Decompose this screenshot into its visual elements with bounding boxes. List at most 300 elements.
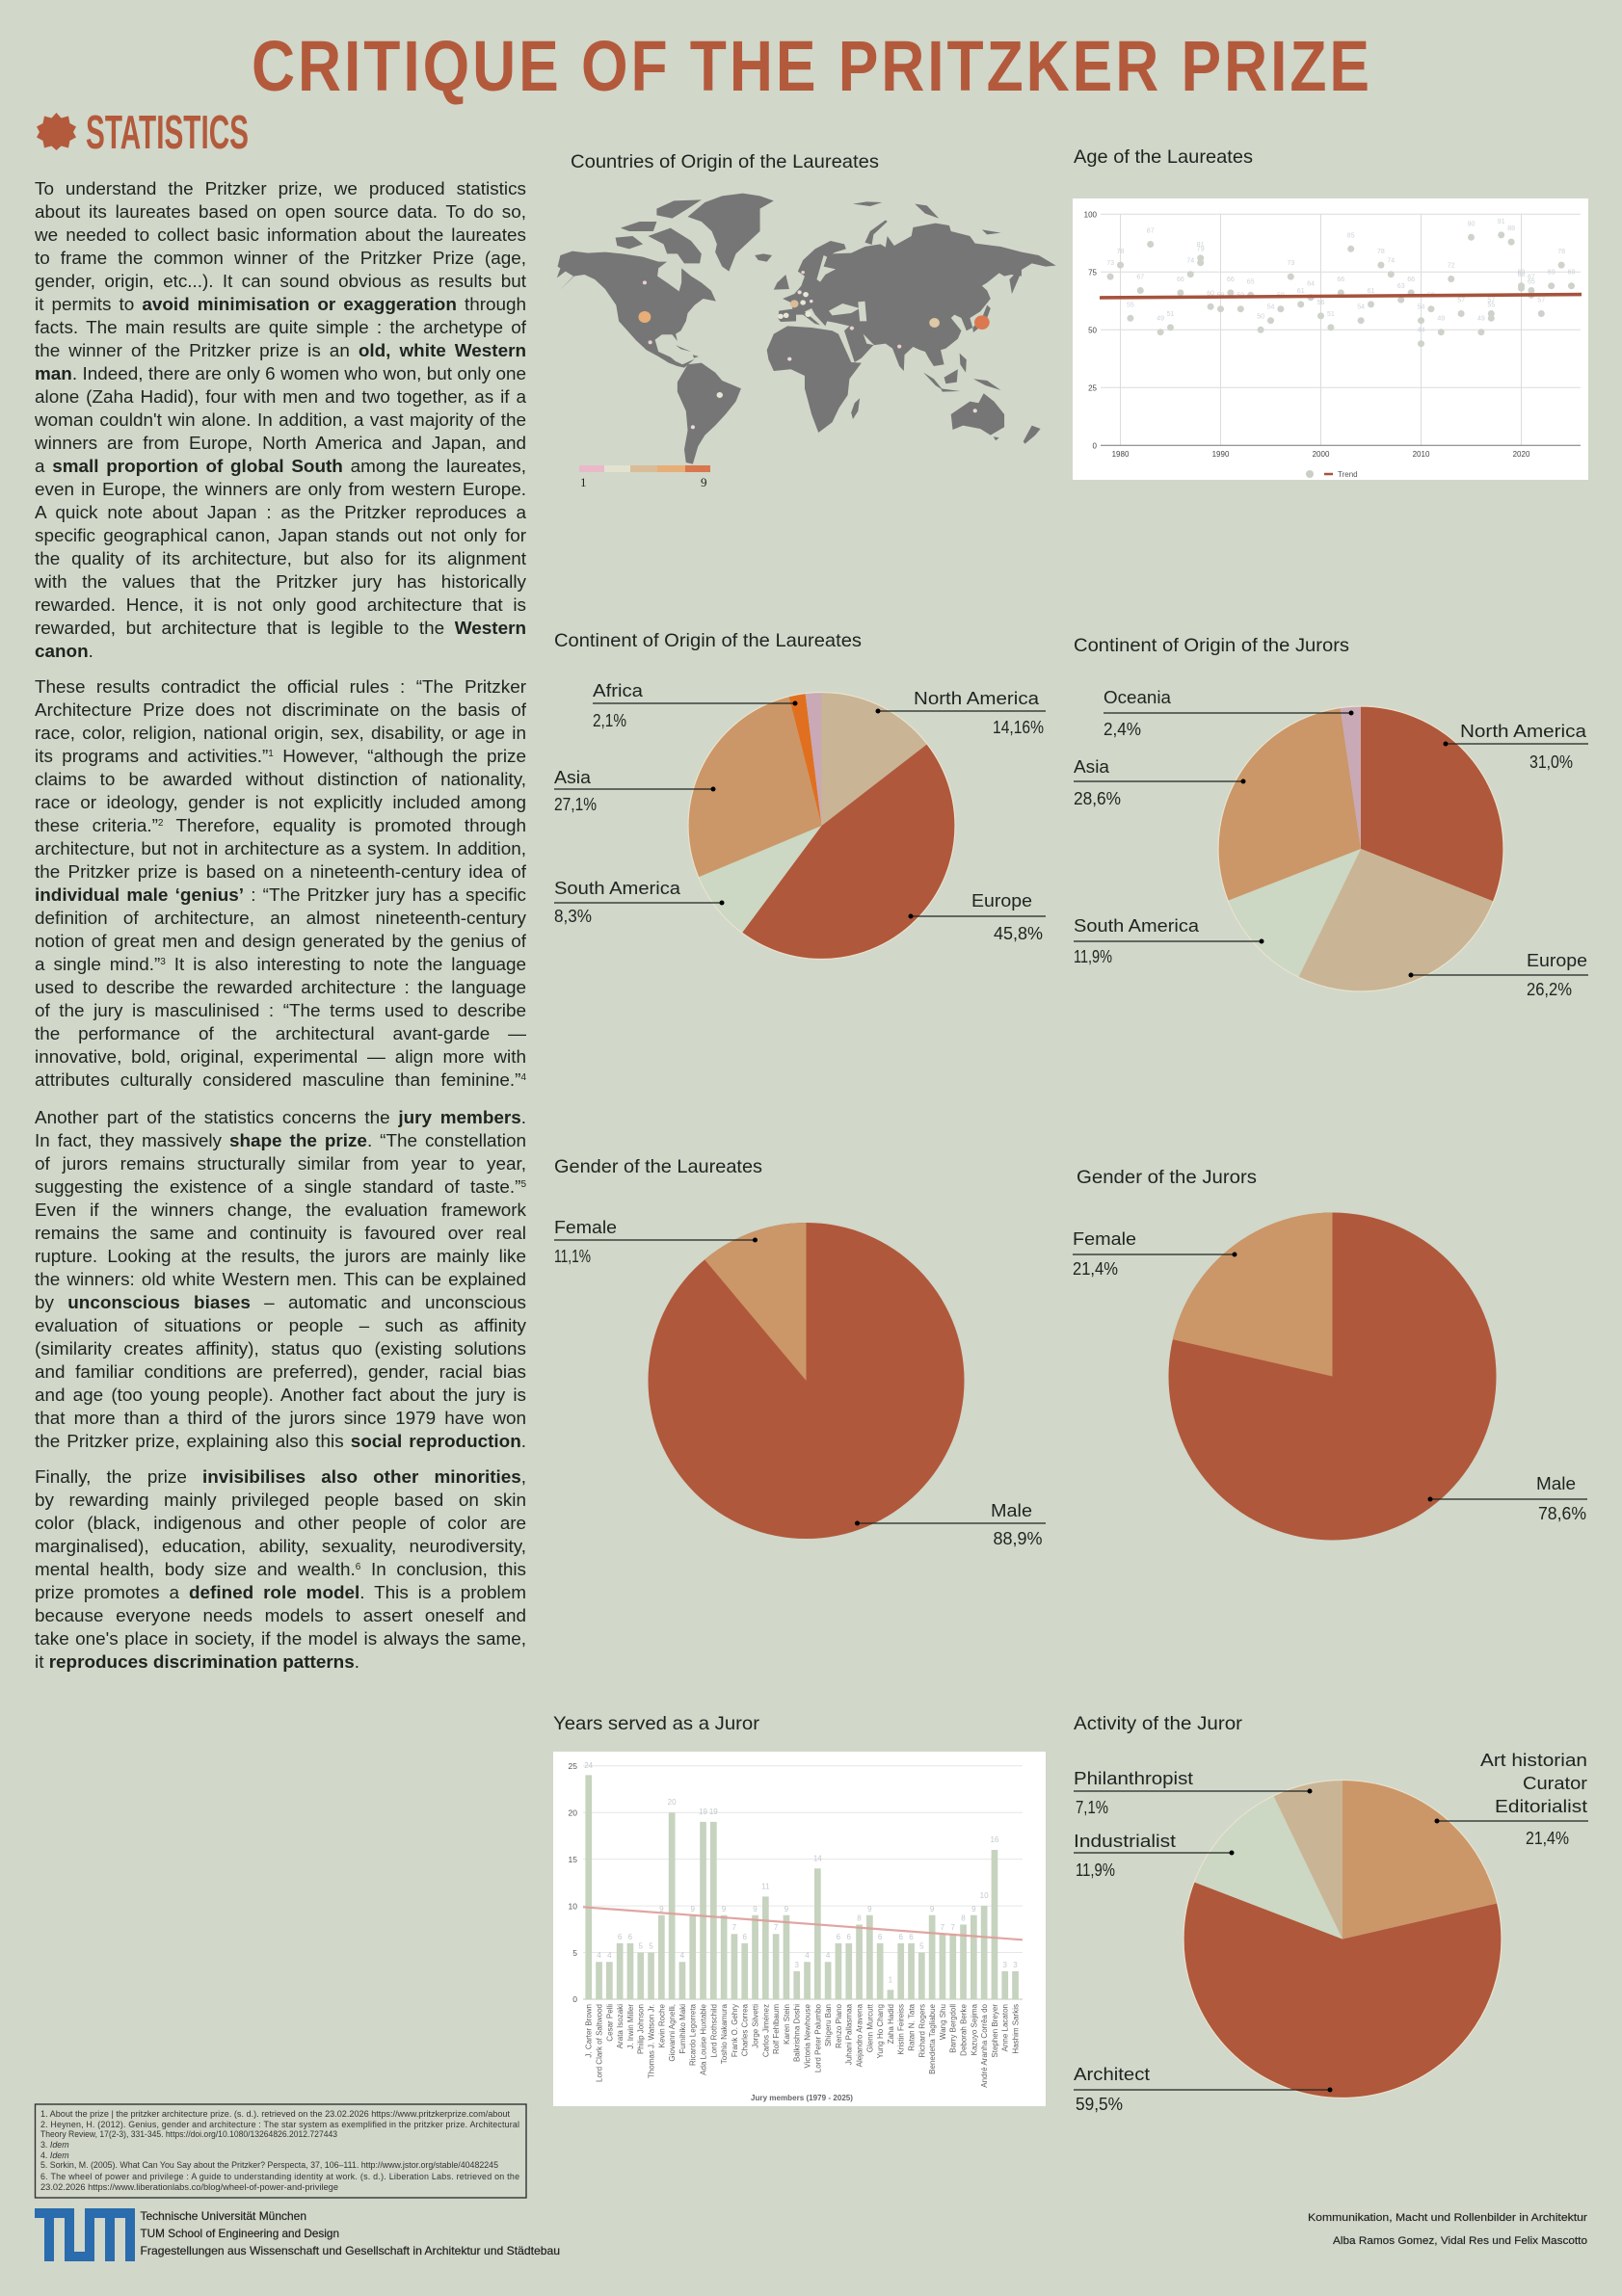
- bar chart: 9: [690, 1905, 695, 1913]
- chart legend: Trend: [1338, 470, 1358, 479]
- text block: paragraph 1: alone (Zaha Hadid), four with men and two together, as if a: [35, 387, 526, 408]
- text block: paragraph 1: the winner of the Pritzker prize is an old, white Western: [35, 341, 526, 361]
- bar chart: Juhani Pallasmaa: [845, 2003, 854, 2065]
- callout: Asia: Asia: [1074, 756, 1110, 777]
- bar chart: 4: [680, 1951, 685, 1960]
- scatter chart: 67: [1136, 274, 1144, 281]
- chart background: [553, 1752, 1046, 2106]
- text block: paragraph 2: innovative, bold, original, experimental — align more with: [35, 1047, 526, 1068]
- bar chart: [569, 1761, 1023, 2102]
- bar chart: 11: [761, 1882, 770, 1890]
- heading: age: Age of the Laureates: [1074, 146, 1253, 168]
- scatter chart: 69: [1518, 270, 1525, 277]
- callout: Europe: [1409, 950, 1588, 999]
- scatter chart: 54: [1357, 304, 1365, 311]
- text block: paragraph 3: the winners: old white Western men. This can be explained: [35, 1270, 526, 1289]
- scatter chart: 65: [1247, 278, 1255, 285]
- callout: Art historian Curator Editorialist: [1434, 1750, 1588, 1848]
- map legend: 1: [580, 475, 586, 489]
- text block: paragraph 1: canon.: [35, 642, 93, 662]
- text block: paragraph 2: the Pritzker prize is based on a nineteenth-century idea of: [35, 862, 526, 883]
- bar chart: 3: [1013, 1961, 1018, 1969]
- scatter chart: 2000: [1313, 450, 1330, 459]
- heading: Gender of the Jurors: [1077, 1167, 1257, 1188]
- text block: paragraph 3: (similarity creates affinity), status quo (existing solutions: [35, 1339, 526, 1359]
- bar chart: Wang Shu: [939, 2004, 947, 2040]
- callout: Male: 88,9%: [993, 1528, 1043, 1548]
- bar chart: 25: [569, 1761, 577, 1771]
- scatter chart: 57: [1487, 297, 1495, 304]
- text block: paragraph 2: notion of great men and design generated by the genius of: [35, 932, 526, 952]
- text block: paragraph 2: attributes culturally considered masculine than feminine.”4: [35, 1070, 526, 1091]
- scatter chart: 87: [1147, 227, 1155, 235]
- bar chart: Lord Clark of Saltwood: [596, 2004, 603, 2082]
- bar chart: 5: [919, 1942, 924, 1950]
- text block: paragraph 1: gender, origin, etc...). It can sound obvious as results but: [35, 272, 526, 292]
- callout: Oceania: [1103, 687, 1353, 739]
- trend line: [583, 1907, 1023, 1940]
- text block: paragraph 2: its programs and activities.”1 However, “although the prize: [35, 747, 526, 767]
- bar chart: 10: [569, 1902, 577, 1912]
- callout: Europe: 45,8%: [994, 923, 1043, 943]
- bar chart: Carlos Jiménez: [761, 2004, 770, 2057]
- bar chart: Renzo Piano: [835, 2003, 843, 2048]
- bar chart: Stephen Breyer: [991, 2004, 999, 2058]
- panel: years served as juror: [553, 1713, 1046, 2106]
- references box: 5. Sorkin, M. (2005). What Can You Say about the Pritzker? Perspecta, 37, 106–111. http://www.jstor.org/stable/40482245: [40, 2160, 498, 2170]
- text block: paragraph 4: color (black, indigenous and other people of color are: [35, 1514, 526, 1534]
- scatter chart: 73: [1287, 260, 1294, 267]
- text block: paragraph 1: it permits to avoid minimisation or exaggeration through: [35, 295, 526, 315]
- heading: Continent of Origin of the Jurors: [1074, 635, 1349, 656]
- panel: countries map: [557, 151, 1056, 489]
- bar chart: Kevin Roche: [657, 2003, 666, 2047]
- callout: Asia: Asia: [554, 767, 592, 787]
- bar chart: Yung Ho Chang: [876, 2004, 885, 2058]
- bar chart: Balkrishna Doshi: [793, 2004, 802, 2062]
- callout: South America: [1074, 915, 1264, 966]
- references box: 2. Heynen, H. (2012). Genius, gender and architecture : The star system as exemplified in the pritzker prize. Architectural: [40, 2120, 519, 2129]
- authors text: [1308, 2212, 1587, 2247]
- bar chart: 5: [638, 1942, 643, 1950]
- callout: Female: 11,1%: [554, 1246, 591, 1266]
- bar chart: Glenn Murcutt: [865, 2003, 874, 2052]
- scatter chart: 73: [1106, 260, 1114, 267]
- scatter chart: 67: [1528, 274, 1535, 281]
- scatter chart: 79: [1197, 247, 1205, 253]
- bar chart: 7: [941, 1923, 945, 1932]
- references box: 4. Idem: [40, 2151, 69, 2160]
- callout: Europe: [908, 890, 1046, 943]
- bar chart: 6: [898, 1933, 903, 1941]
- text block: paragraph 1: the quality of its architecture, but also for its alignment: [35, 549, 526, 569]
- callout: South America: 11,9%: [1074, 946, 1112, 966]
- bar chart: 9: [753, 1905, 758, 1913]
- scatter chart: 74: [1387, 258, 1395, 265]
- text block: paragraph 2: These results contradict the official rules : “The Pritzker: [35, 677, 526, 698]
- text block: paragraph 4: marginalised), education, ability, sexuality, neurodiversity,: [35, 1537, 526, 1557]
- callout: Female: [554, 1217, 758, 1266]
- text block: paragraph 1: winners are from Europe, North America and Japan, and: [35, 434, 526, 454]
- bar chart: Charles Correa: [741, 2003, 750, 2056]
- scatter chart: 2020: [1513, 450, 1530, 459]
- bar chart: Ada Louise Huxtable: [700, 2003, 707, 2075]
- scatter chart: 66: [1227, 277, 1235, 283]
- bar chart: Ricardo Legorreta: [689, 2003, 698, 2066]
- bar chart: 10: [980, 1891, 989, 1900]
- scatter chart: 59: [1427, 293, 1435, 300]
- callout: North America: North America: [914, 688, 1040, 708]
- bar chart: 1: [889, 1975, 893, 1984]
- pie chart: [1168, 1212, 1496, 1540]
- scatter chart: 54: [1418, 304, 1424, 311]
- institution text: [141, 2210, 560, 2257]
- text block: paragraph 1: rewarded. Hence, it is not only good architecture that is: [35, 595, 526, 616]
- section heading: statistics: [37, 107, 249, 159]
- bar chart: 9: [784, 1905, 789, 1913]
- bar chart: 6: [878, 1933, 883, 1941]
- scatter chart: 59: [1217, 293, 1224, 300]
- icon: badge: [37, 113, 76, 150]
- references box: 23.02.2026 https://www.liberationlabs.co/blog/wheel-of-power-and-privilege: [40, 2182, 338, 2192]
- scatter chart: 1990: [1212, 450, 1230, 459]
- heading text: STATISTICS: [86, 107, 249, 159]
- scatter chart: 51: [1167, 311, 1174, 318]
- callout: Europe: 26,2%: [1527, 979, 1572, 999]
- bar chart: Jorge Silvetti: [752, 2004, 759, 2048]
- scatter chart: 65: [1528, 278, 1535, 285]
- callout: Asia: [1074, 756, 1245, 808]
- bar chart: 14: [813, 1854, 822, 1862]
- callout: Asia: 27,1%: [554, 794, 597, 814]
- scatter chart: 49: [1477, 316, 1485, 323]
- bar chart: 20: [569, 1808, 577, 1817]
- text block: paragraph 4: because everyone needs models to assert oneself and: [35, 1606, 526, 1626]
- heading: Years served as a Juror: [553, 1713, 760, 1734]
- callout: Europe: Europe: [1527, 950, 1587, 970]
- panel: gender of laureates: [554, 1156, 1046, 1548]
- text block: paragraph 3: evaluation of situations or people – such as affinity: [35, 1316, 526, 1335]
- text block: paragraph 3: [35, 1108, 526, 1451]
- text block: paragraph 4: [35, 1467, 526, 1673]
- text block: paragraph 1: about its laureates based on open source data. To do so,: [35, 202, 526, 223]
- text block: paragraph 1: a small proportion of global South among the laureates,: [35, 457, 526, 477]
- text block: paragraph 4: it reproduces discrimination patterns.: [35, 1652, 359, 1673]
- callout: Female: Female: [554, 1217, 617, 1237]
- scatter chart: 1980: [1112, 450, 1130, 459]
- callout: Male: [855, 1500, 1046, 1548]
- scatter chart: 63: [1397, 283, 1405, 290]
- scatter chart: 57: [1537, 297, 1545, 304]
- logo: TUM: [35, 2208, 135, 2261]
- bar chart: 5: [649, 1942, 653, 1950]
- scatter chart: 69: [1568, 270, 1575, 277]
- callout: Africa: [593, 680, 798, 730]
- text block: paragraph 3: the Pritzker prize, explaining also this social reproduction.: [35, 1432, 526, 1451]
- scatter chart: 68: [1518, 272, 1525, 278]
- text block: paragraph 2: Architecture Prize does not discriminate on the basis of: [35, 700, 526, 721]
- text block: paragraph 1: with the values that the Pritzker jury has historically: [35, 572, 526, 593]
- pie chart: [1183, 1781, 1502, 2098]
- bar chart: 19: [699, 1808, 707, 1816]
- scatter chart: 78: [1117, 249, 1124, 255]
- bar chart: Cesar Pelli: [605, 2004, 614, 2042]
- callout: Oceania: 2,4%: [1103, 719, 1141, 739]
- bar chart: 6: [742, 1933, 747, 1941]
- callout: Philanthropist: Philanthropist: [1074, 1768, 1194, 1788]
- scatter chart: 78: [1377, 249, 1385, 255]
- text block: paragraph 2: architecture, but not in architecture as a system. In addition,: [35, 839, 526, 859]
- trend line: [1100, 295, 1582, 298]
- callout: Female: 21,4%: [1073, 1258, 1118, 1279]
- scatter chart: 55: [1127, 302, 1134, 308]
- scatter chart: 91: [1498, 219, 1505, 225]
- text block: paragraph 1: woman couldn't win alone. In addition, a vast majority of the: [35, 410, 526, 431]
- bar chart: J. Irwin Miller: [626, 2004, 635, 2049]
- scatter chart: 49: [1437, 316, 1445, 323]
- world map: [557, 194, 1056, 464]
- text block: paragraph 4: prize promotes a defined role model. This is a problem: [35, 1583, 526, 1603]
- bar chart: Lord Peter Palumbo: [813, 2003, 822, 2072]
- callout: Industrialist: 11,9%: [1076, 1860, 1115, 1880]
- callout: Architect: Architect: [1074, 2064, 1151, 2084]
- pie chart: [1218, 706, 1503, 991]
- bar chart: 9: [659, 1905, 664, 1913]
- pie chart: [688, 692, 955, 960]
- callout: Female: [1073, 1228, 1237, 1279]
- text block: paragraph 1: we needed to collect basic information about the laureates: [35, 225, 526, 246]
- bar chart: André Aranha Corrêa do: [980, 2003, 989, 2088]
- authors text: Alba Ramos Gomez, Vidal Res und Felix Mascotto: [1333, 2235, 1587, 2247]
- bar chart: 8: [857, 1913, 862, 1923]
- bar chart: Benedetta Tagliabue: [928, 2003, 937, 2074]
- callout: Philanthropist: 7,1%: [1076, 1797, 1108, 1817]
- bar chart: Zaha Hadid: [887, 2004, 895, 2044]
- callout: Male: 78,6%: [1538, 1503, 1586, 1523]
- text block: paragraph 1: To understand the Pritzker prize, we produced statistics: [35, 179, 526, 199]
- bar chart: 6: [837, 1933, 841, 1941]
- text block: paragraph 3: suggesting the existence of a single standard of taste.”5: [35, 1177, 526, 1197]
- bar chart: 6: [618, 1933, 623, 1941]
- callout: South America: 8,3%: [554, 906, 592, 926]
- scatter chart: 60: [1207, 290, 1214, 297]
- bar chart: 15: [569, 1855, 577, 1864]
- bar chart: Barry Bergdoll: [949, 2004, 958, 2053]
- bar chart: 9: [971, 1905, 976, 1913]
- callout: Oceania: Oceania: [1103, 687, 1172, 707]
- scatter chart: 74: [1186, 258, 1194, 265]
- bar chart: Alejandro Aravena: [856, 2003, 864, 2067]
- title: CRITIQUE OF THE PRITZKER PRIZE: [252, 26, 1372, 106]
- scatter chart: 85: [1347, 232, 1355, 239]
- bar chart: 9: [930, 1905, 935, 1913]
- references box: Theory Review, 17(2-3), 331-345. https://doi.org/10.1080/13264826.2012.727443: [40, 2129, 337, 2139]
- callout: Art historian Curator Editorialist: Curator: [1523, 1773, 1587, 1793]
- callout: Art historian Curator Editorialist: Editorialist: [1495, 1796, 1588, 1816]
- bar chart: 19: [709, 1808, 718, 1816]
- bar chart: Kazuyo Sejima: [970, 2003, 978, 2055]
- pie chart: [648, 1223, 964, 1539]
- text block: paragraph 1: [35, 179, 526, 662]
- scatter chart: 78: [1557, 249, 1565, 255]
- scatter chart: 0: [1093, 441, 1098, 451]
- callout: Female: Female: [1073, 1228, 1136, 1249]
- bar chart: Richard Rogers: [917, 2004, 926, 2058]
- scatter chart: 61: [1297, 288, 1305, 295]
- callout: Africa: Africa: [593, 680, 644, 700]
- text block: paragraph 4: by rewarding mainly privileged people based on skin: [35, 1491, 526, 1511]
- panel: continent of jurors: [1074, 635, 1588, 999]
- scatter chart: 56: [1317, 300, 1324, 306]
- scatter chart: 66: [1407, 277, 1415, 283]
- scatter chart: 54: [1267, 304, 1274, 311]
- callout: Industrialist: Industrialist: [1074, 1831, 1177, 1851]
- callout: Industrialist: [1074, 1831, 1234, 1880]
- scatter chart: 69: [1548, 270, 1556, 277]
- text block: paragraph 2: these criteria.”2 Therefore, equality is promoted through: [35, 816, 526, 836]
- callout: Philanthropist: [1074, 1768, 1313, 1817]
- references box: [35, 2104, 526, 2198]
- panel: age of laureates: [1073, 146, 1588, 480]
- callout: North America: North America: [1460, 721, 1587, 741]
- chart legend: [1306, 470, 1358, 479]
- scatter chart: 72: [1448, 262, 1455, 270]
- bar chart: Rolf Fehlbaum: [772, 2004, 781, 2054]
- bar chart: Kristin Feireiss: [897, 2004, 906, 2054]
- callout: Europe: Europe: [971, 890, 1032, 910]
- text block: paragraph 2: individual male ‘genius’ : “The Pritzker jury has a specific: [35, 885, 526, 906]
- bar chart: Victoria Newhouse: [804, 2003, 811, 2069]
- scatter chart: 55: [1487, 302, 1495, 308]
- bar chart: Hashim Sarkis: [1012, 2004, 1020, 2054]
- text block: paragraph 1: to frame the common winner of the Pritzker Prize (age,: [35, 249, 526, 269]
- scatter chart: 59: [1236, 293, 1244, 300]
- scatter chart: 49: [1157, 316, 1164, 323]
- scatter chart: 66: [1337, 277, 1344, 283]
- scatter chart: 100: [1084, 210, 1098, 220]
- scatter chart: 25: [1088, 383, 1098, 393]
- bar chart: 8: [961, 1913, 966, 1923]
- heading: Continent of Origin of the Laureates: [554, 630, 862, 651]
- text block: paragraph 3: that more than a third of the jurors since 1979 have won: [35, 1409, 526, 1428]
- bar chart: Thomas J. Watson Jr.: [648, 2004, 655, 2078]
- bar chart: Philip Johnson: [637, 2004, 646, 2054]
- map dots: [638, 271, 990, 429]
- text block: paragraph 1: A quick note about Japan : as the Pritzker reproduces a: [35, 503, 526, 523]
- text block: paragraph 3: and familiar conditions are preferred), gender, racial bias: [35, 1362, 526, 1382]
- bar chart: Lord Rothschild: [709, 2004, 718, 2058]
- bar chart: Karen Stein: [783, 2004, 791, 2045]
- text block: paragraph 1: man. Indeed, there are only 6 women who won, but only one: [35, 364, 526, 384]
- text block: paragraph 2: race or ideology, gender is not explicitly included among: [35, 793, 526, 813]
- scatter chart: 61: [1368, 288, 1374, 295]
- map legend: [579, 465, 710, 489]
- panel: activity of the juror: [1074, 1713, 1588, 2114]
- callout: Architect: 59,5%: [1076, 2094, 1123, 2114]
- text block: paragraph 2: of the jury is masculinised : “The terms used to describe: [35, 1001, 526, 1021]
- references box: 3. Idem: [40, 2140, 69, 2150]
- references box: 1. About the prize | the pritzker architecture prize. (s. d.). retrieved on the 23.02.2026 https://www.pritzkerprize.com/about: [40, 2109, 511, 2119]
- callout: North America: 31,0%: [1529, 752, 1573, 772]
- callout: North America: 14,16%: [993, 717, 1044, 737]
- scatter chart: 88: [1507, 225, 1515, 232]
- text block: paragraph 2: used to describe the rewarded architecture : the language: [35, 978, 526, 998]
- callout: Male: Male: [1536, 1473, 1576, 1493]
- institution text: TUM School of Engineering and Design: [141, 2228, 339, 2240]
- callout: Africa: 2,1%: [593, 710, 626, 730]
- institution text: Fragestellungen aus Wissenschaft und Gesellschaft in Architektur und Städtebau: [141, 2245, 560, 2257]
- text block: paragraph 3: and age (too young people). Another fact about the jury is: [35, 1386, 526, 1405]
- bar chart: Anne Lacaton: [1001, 2004, 1010, 2051]
- scatter chart: 81: [1197, 242, 1205, 249]
- panel: gender of jurors: [1073, 1167, 1587, 1540]
- scatter chart: 64: [1307, 281, 1315, 288]
- bar chart: 4: [805, 1951, 810, 1960]
- bar chart: 4: [607, 1951, 612, 1960]
- chart background: [1073, 198, 1588, 480]
- bar chart: Toshio Nakamura: [720, 2003, 729, 2064]
- text block: paragraph 3: Even if the winners change, the evaluation framework: [35, 1201, 526, 1220]
- bar chart: 3: [794, 1961, 799, 1969]
- scatter chart: 66: [1177, 277, 1184, 283]
- heading: Gender of the Laureates: [554, 1156, 762, 1177]
- text block: paragraph 1: specific geographical canon, Japan stands out not only for: [35, 526, 526, 546]
- callout: South America: [554, 878, 725, 926]
- text block: paragraph 4: Finally, the prize invisibilises also other minorities,: [35, 1467, 526, 1488]
- bar chart: Arata Isozaki: [616, 2004, 625, 2048]
- callout: Male: [1428, 1473, 1587, 1523]
- scatter chart: 51: [1327, 311, 1335, 318]
- text block: paragraph 2: a single mind.”3 It is also interesting to note the language: [35, 955, 526, 975]
- bar chart: 5: [572, 1948, 577, 1958]
- callout: South America: South America: [1074, 915, 1200, 936]
- callout: Art historian Curator Editorialist: Art historian: [1480, 1750, 1587, 1770]
- bar chart: 7: [950, 1923, 955, 1932]
- text block: paragraph 4: mental health, body size and wealth.6 In conclusion, this: [35, 1560, 526, 1580]
- bar chart: 9: [867, 1905, 872, 1913]
- bar chart: 4: [597, 1951, 601, 1960]
- scatter chart: 44: [1418, 328, 1424, 334]
- text block: paragraph 2: the performance of the architectural avant-garde —: [35, 1024, 526, 1044]
- heading: countries: Countries of Origin of the Laureates: [571, 151, 879, 172]
- heading: Activity of the Juror: [1074, 1713, 1243, 1734]
- callout: Art historian Curator Editorialist: 21,4%: [1526, 1828, 1569, 1848]
- authors text: Kommunikation, Macht und Rollenbilder in Architektur: [1308, 2212, 1587, 2224]
- text block: paragraph 3: In fact, they massively shape the prize. “The constellation: [35, 1131, 526, 1150]
- text block: paragraph 3: rupture. Looking at the results, the jurors are mainly like: [35, 1247, 526, 1266]
- bar chart: 16: [990, 1835, 999, 1844]
- bar chart: 7: [774, 1923, 779, 1932]
- text block: paragraph 2: definition of architecture, an almost nineteenth-century: [35, 909, 526, 929]
- bar chart: Deborah Berke: [960, 2003, 968, 2056]
- scatter chart: [1084, 210, 1582, 479]
- institution text: Technische Universität München: [141, 2210, 306, 2223]
- text block: paragraph 2: claims to be awarded without distinction of nationality,: [35, 770, 526, 790]
- callout: North America: [1444, 721, 1588, 772]
- scatter chart: 75: [1088, 268, 1098, 277]
- references box: 6. The wheel of power and privilege : A guide to understanding identity at work. (s. d.). Liberation Labs. retrieved on the: [40, 2172, 519, 2181]
- scatter chart: 50: [1088, 326, 1098, 335]
- scatter chart: 57: [1457, 297, 1465, 304]
- bar chart: Giovanni Agnelli,: [668, 2004, 677, 2062]
- panel: continent of laureates: [554, 630, 1046, 960]
- text block: paragraph 3: of jurors remains structurally similar from year to year,: [35, 1154, 526, 1174]
- scatter chart: 59: [1277, 293, 1285, 300]
- text block: paragraph 1: even in Europe, the winners are only from western Europe.: [35, 480, 526, 500]
- text block: paragraph 3: remains the same and continuity is favoured over real: [35, 1224, 526, 1243]
- text block: paragraph 2: [35, 677, 526, 1091]
- text block: paragraph 2: race, color, religion, national origin, sex, disability, or age in: [35, 724, 526, 744]
